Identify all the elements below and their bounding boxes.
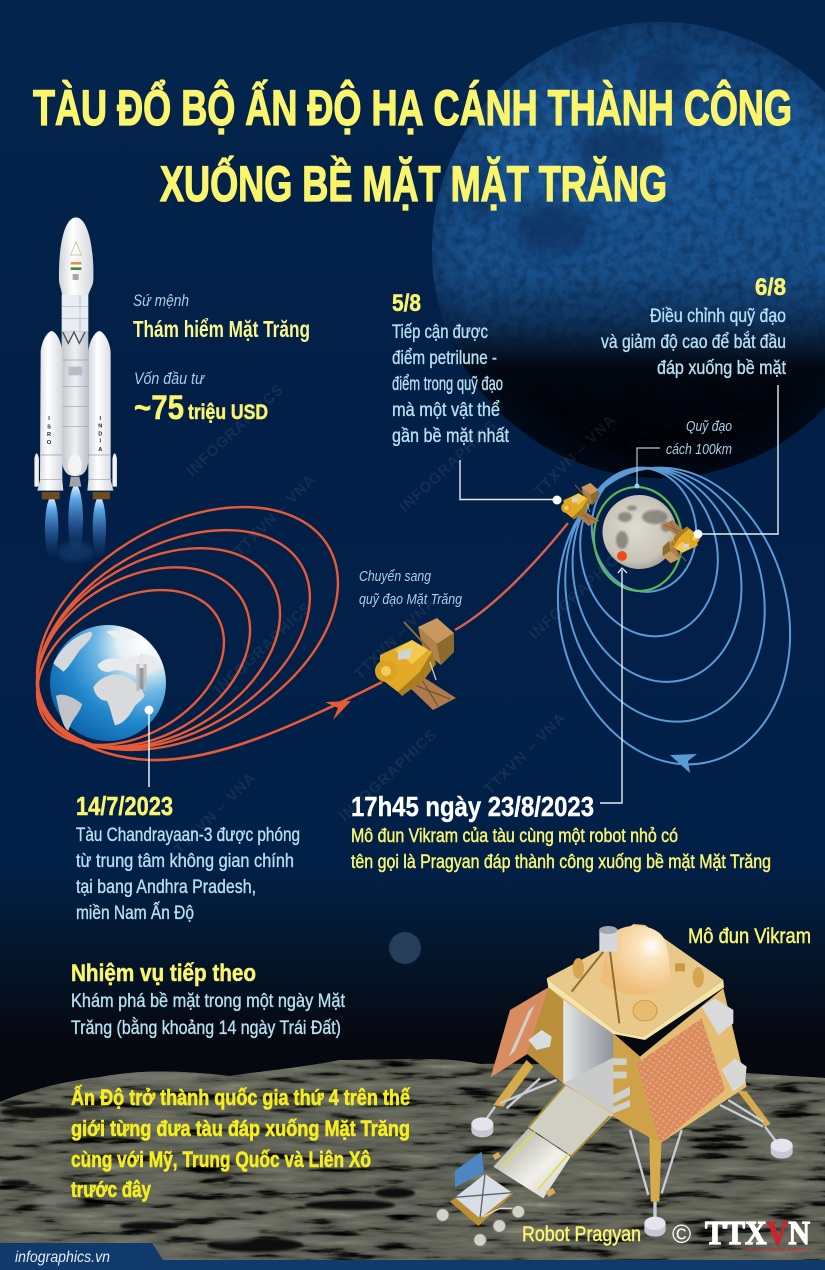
mission text: Thám hiểm Mặt Trăng: [133, 316, 310, 342]
lunar surface: [0, 1050, 825, 1265]
transfer label: quỹ đạo Mặt Trăng: [359, 591, 463, 608]
rocket labels: I: [100, 416, 102, 422]
6/8 text: đáp xuống bề mặt: [657, 358, 787, 379]
dome: [600, 926, 672, 995]
rocket labels: I: [48, 416, 50, 422]
rocket labels: O: [47, 440, 52, 446]
conclusion text: [71, 1085, 411, 1202]
lunar orbits: [529, 444, 819, 788]
launch date text: Tàu Chandrayaan-3 được phóng: [76, 825, 300, 846]
green 100km orbit: [589, 483, 687, 595]
watermarks: INFOGRAPHICS: [396, 417, 501, 516]
watermarks: TTXVN – VNA: [231, 471, 320, 560]
watermarks: INFOGRAPHICS: [183, 381, 288, 480]
launch date text: miền Nam Ấn Độ: [76, 902, 194, 924]
6/8 text: 6/8: [755, 274, 786, 301]
next mission text: Khám phá bề mặt trong một ngày Mặt: [71, 991, 346, 1012]
conclusion text: cùng với Mỹ, Trung Quốc và Liên Xô: [71, 1147, 371, 1172]
transfer trajectory with arrow: [38, 523, 568, 760]
orbit label: Quỹ đạo: [686, 418, 732, 435]
mission text: ~75: [134, 389, 184, 427]
orbit label: cách 100km: [666, 441, 732, 458]
watermarks: TTXVN – VNA: [481, 709, 570, 798]
arrow: landing site: [600, 568, 627, 803]
5/8 text: gần bề mặt nhất: [392, 426, 510, 447]
rocket labels: [47, 416, 102, 453]
footer bar: infographics.vn: [15, 1249, 110, 1266]
watermarks: INFOGRAPHICS: [336, 726, 441, 825]
rocket labels: A: [98, 447, 102, 453]
faint distant moon: [389, 932, 421, 964]
6/8 text: và giảm độ cao để bắt đầu: [601, 331, 786, 353]
leader: 100km orbit: [634, 448, 660, 488]
mission text: Sứ mệnh: [133, 291, 189, 310]
leader: 6/8: [694, 385, 778, 538]
transfer label: [359, 568, 463, 608]
landing text: [351, 791, 771, 873]
watermarks: TTXVN – VNA: [171, 769, 260, 858]
next mission text: Nhiệm vụ tiếp theo: [71, 960, 256, 987]
satellite: lunar transfer: [375, 618, 456, 710]
conclusion text: Ấn Độ trở thành quốc gia thứ 4 trên thế: [71, 1085, 411, 1110]
5/8 text: [392, 290, 510, 447]
6/8 text: Điều chỉnh quỹ đạo: [650, 306, 786, 327]
label: Robot Pragyan: Robot Pragyan: [522, 1223, 641, 1246]
large moon: [430, 20, 825, 480]
label: Mô đun Vikram: Mô đun Vikram: [688, 925, 811, 948]
lander left panel: [491, 987, 548, 1077]
landing site dot: [617, 551, 627, 561]
equipment boxes: [702, 998, 733, 1035]
rocket labels: N: [98, 424, 102, 430]
ramp: [492, 1085, 613, 1198]
lander legs: [471, 1060, 793, 1237]
rocket labels: S: [47, 424, 51, 430]
5/8 text: điểm trong quỹ đạo: [392, 374, 503, 395]
copper panel: [637, 1018, 725, 1143]
satellite: petrilune: [561, 483, 599, 526]
launch date text: [76, 791, 300, 924]
5/8 text: mà một vật thể: [392, 400, 500, 421]
satellite: orbit adjustment: [662, 520, 700, 563]
leader: launch point: [144, 706, 154, 787]
next mission text: [71, 960, 346, 1039]
TTXVN logo: ©: [672, 1219, 691, 1249]
rocket labels: R: [47, 432, 51, 438]
conclusion text: giới từng đưa tàu đáp xuống Mặt Trăng: [71, 1116, 410, 1141]
lander body: [527, 987, 747, 1143]
rocket labels: I: [100, 439, 102, 445]
launch date text: 14/7/2023: [76, 791, 173, 821]
footpads: [471, 1124, 493, 1137]
lander illustration: [436, 924, 793, 1246]
mission text: triệu USD: [188, 401, 268, 424]
watermarks: TTXVN – VNA: [351, 594, 440, 683]
mission text: Vốn đầu tư: [134, 369, 205, 388]
icon: small rocket on globe: [136, 653, 147, 691]
landing text: Mô đun Vikram của tàu cùng một robot nhỏ có: [351, 826, 678, 847]
title: [33, 79, 792, 212]
5/8 text: điểm petrilune -: [392, 348, 497, 369]
footer bar: [0, 1243, 825, 1270]
watermarks: TTXVN – VNA: [531, 411, 620, 500]
next mission text: Trăng (bằng khoảng 14 ngày Trái Đất): [71, 1017, 341, 1039]
launch date text: từ trung tâm không gian chính: [76, 851, 294, 872]
TTXVN logo: Vietnam News Agency: [742, 1247, 811, 1253]
icon: earth globe: [50, 625, 166, 741]
6/8 text: [601, 274, 787, 379]
blue arrowhead: [670, 754, 697, 773]
top deck: [547, 924, 723, 1037]
dishes: [633, 1000, 657, 1021]
orbit label: [666, 418, 732, 458]
watermarks: INFOGRAPHICS: [526, 544, 631, 643]
rover: [436, 1152, 525, 1246]
watermarks: INFOGRAPHICS: [211, 599, 316, 698]
open bay: [563, 1000, 613, 1083]
struts: [572, 952, 619, 1023]
watermarks: [171, 381, 631, 858]
chart: earth orbits: [0, 457, 381, 800]
5/8 text: 5/8: [392, 290, 421, 317]
mission text: [133, 291, 310, 427]
small moon: [602, 495, 676, 569]
transfer label: Chuyển sang: [359, 568, 432, 585]
conclusion text: trước đây: [71, 1177, 152, 1202]
cylinder: [599, 928, 617, 952]
rocket illustration: [34, 217, 117, 562]
rocket labels: D: [98, 432, 102, 438]
earth with launch orbits: [0, 457, 381, 800]
leader: 5/8: [460, 460, 562, 504]
launch date text: tại bang Andhra Pradesh,: [76, 877, 256, 898]
landing text: 17h45 ngày 23/8/2023: [351, 791, 594, 822]
TTXVN logo: TTXVN: [705, 1215, 810, 1252]
icon: engine flames: [45, 485, 106, 562]
5/8 text: Tiếp cận được: [392, 322, 488, 343]
